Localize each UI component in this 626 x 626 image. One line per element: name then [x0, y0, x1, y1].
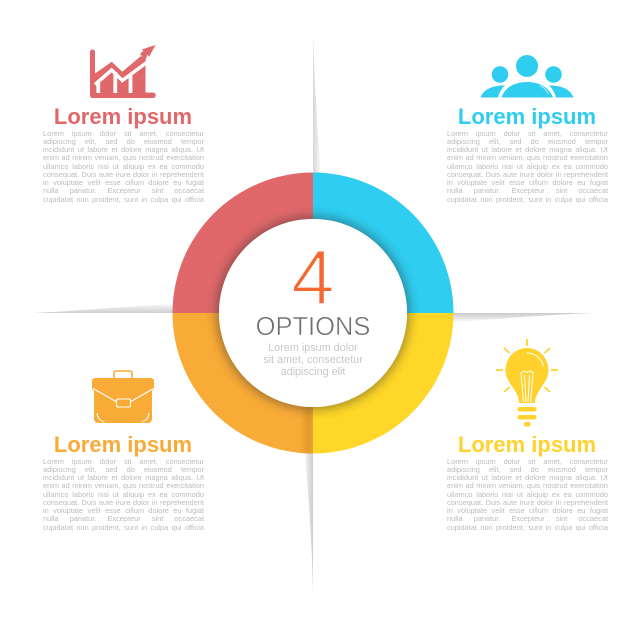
- center text: [263, 342, 363, 378]
- text block: red: ullamco laboris nisi ut aliquip ex ea commodo: [43, 162, 204, 170]
- text block: orange: enim ad minim veniam, quis nostrud exercitation: [43, 481, 204, 490]
- text block: yellow: adipiscing elit, sed do eiusmod tempor: [447, 465, 608, 474]
- text block: blue: in voluptate velit esse cillum dolore eu fugiat: [447, 178, 608, 187]
- center circle: [219, 219, 407, 407]
- text block: yellow: in voluptate velit esse cillum dolore eu fugiat: [447, 506, 608, 515]
- text block: blue: consequat. Duis aute irure dolor in reprehenderit: [447, 170, 608, 179]
- text block: red: in voluptate velit esse cillum dolore eu fugiat: [43, 178, 204, 187]
- text block: yellow: incididunt ut labore et dolore magna aliqua. Ut: [447, 473, 608, 482]
- text block: red: nulla pariatur. Excepteur sint occaecat: [43, 186, 204, 195]
- text block: orange: Lorem ipsum dolor sit amet, consectetur: [43, 456, 204, 466]
- text block: orange: consequat. Duis aute irure dolor in reprehenderit: [43, 498, 204, 507]
- text block: orange: cupidatat non proident, sunt in culpa qui officia: [43, 522, 204, 532]
- icon: rising chart: [90, 45, 156, 98]
- text block: blue: adipiscing elit, sed do eiusmod tempor: [447, 137, 608, 146]
- center title: OPTIONS: [256, 313, 370, 341]
- icon: people group: [480, 55, 574, 98]
- text block: orange: adipiscing elit, sed do eiusmod tempor: [43, 465, 204, 474]
- icon: light bulb: [496, 339, 558, 426]
- center text: Lorem ipsum dolor: [268, 342, 358, 354]
- crease shadow: bottom: [304, 452, 313, 593]
- text block: orange: in voluptate velit esse cillum dolore eu fugiat: [43, 506, 204, 515]
- text block: orange: [43, 456, 204, 532]
- donut ring: [172, 172, 454, 454]
- text block: yellow: consequat. Duis aute irure dolor in reprehenderit: [447, 498, 608, 507]
- heading: yellow: Lorem ipsum: [458, 432, 596, 457]
- icon: briefcase: [92, 371, 154, 423]
- text block: yellow: Lorem ipsum dolor sit amet, consectetur: [447, 456, 608, 466]
- center text: adipiscing elit: [281, 366, 345, 378]
- text block: yellow: ullamco laboris nisi ut aliquip ex ea commodo: [447, 490, 608, 498]
- text block: blue: nulla pariatur. Excepteur sint occaecat: [447, 186, 608, 195]
- segment: yellow: [313, 313, 454, 454]
- text block: red: enim ad minim veniam, quis nostrud exercitation: [43, 153, 204, 162]
- text block: yellow: enim ad minim veniam, quis nostrud exercitation: [447, 481, 608, 490]
- center number: 4: [291, 233, 335, 321]
- text block: red: consequat. Duis aute irure dolor in reprehenderit: [43, 170, 204, 179]
- text block: blue: cupidatat non proident, sunt in culpa qui officia: [447, 194, 608, 204]
- text block: red: adipiscing elit, sed do eiusmod tempor: [43, 137, 204, 146]
- orange overlap shadow: [304, 405, 313, 454]
- heading: orange: Lorem ipsum: [54, 432, 192, 457]
- text block: blue: incididunt ut labore et dolore magna aliqua. Ut: [447, 145, 608, 154]
- center text: sit amet, consectetur: [263, 354, 363, 366]
- text block: blue: enim ad minim veniam, quis nostrud exercitation: [447, 153, 608, 162]
- segment: orange: [172, 313, 313, 454]
- text block: orange: incididunt ut labore et dolore magna aliqua. Ut: [43, 473, 204, 482]
- heading: blue: Lorem ipsum: [458, 104, 596, 129]
- crease shadow: left: [33, 304, 174, 313]
- crease shadow: right: [452, 313, 593, 322]
- text block: blue: [447, 128, 608, 204]
- text block: yellow: nulla pariatur. Excepteur sint occaecat: [447, 514, 608, 523]
- text block: orange: nulla pariatur. Excepteur sint occaecat: [43, 514, 204, 523]
- segment: red: [172, 172, 313, 313]
- heading: red: Lorem ipsum: [54, 104, 192, 129]
- text block: red: cupidatat non proident, sunt in culpa qui officia: [43, 194, 204, 204]
- text block: blue: ullamco laboris nisi ut aliquip ex ea commodo: [447, 162, 608, 170]
- segment: blue: [313, 172, 454, 313]
- text block: orange: ullamco laboris nisi ut aliquip ex ea commodo: [43, 490, 204, 498]
- text block: yellow: [447, 456, 608, 532]
- text block: red: incididunt ut labore et dolore magna aliqua. Ut: [43, 145, 204, 154]
- text block: blue: Lorem ipsum dolor sit amet, consectetur: [447, 128, 608, 138]
- text block: red: Lorem ipsum dolor sit amet, consectetur: [43, 128, 204, 138]
- inner circle shadow: [216, 216, 410, 410]
- crease shadow: top: [313, 33, 320, 174]
- text block: yellow: cupidatat non proident, sunt in culpa qui officia: [447, 522, 608, 532]
- text block: red: [43, 128, 204, 204]
